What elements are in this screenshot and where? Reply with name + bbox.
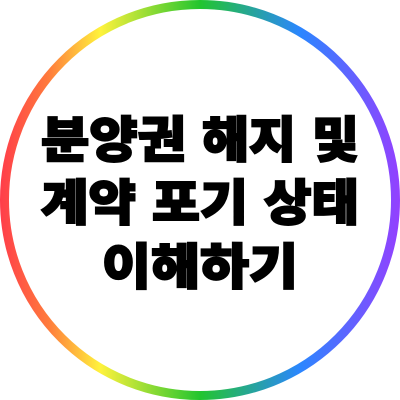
title line 1: 해지	[202, 114, 296, 168]
title line 3: 이해하기	[102, 241, 298, 295]
title line 1: 분양권	[41, 114, 186, 168]
title line 1: 및	[312, 114, 359, 168]
title line 1	[41, 114, 359, 168]
title line 2	[41, 177, 359, 231]
title line 2: 계약	[41, 177, 136, 231]
title	[41, 114, 359, 295]
title line 2: 포기	[152, 177, 248, 231]
title line 2: 상태	[264, 177, 359, 231]
